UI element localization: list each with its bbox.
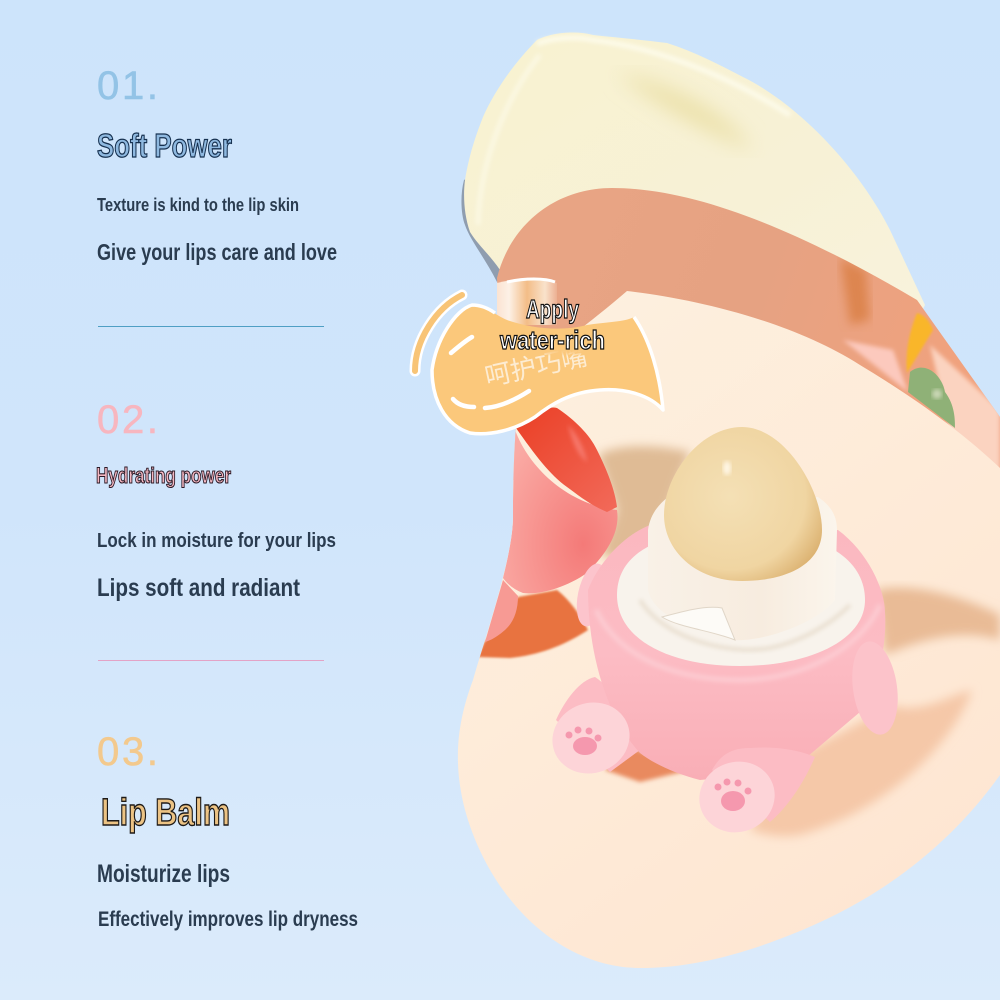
badge label: apply: Apply — [526, 294, 579, 324]
lid foot — [485, 580, 518, 642]
twist tab — [662, 607, 735, 640]
shadow behind egg — [598, 446, 690, 560]
body — [588, 525, 885, 780]
number 03: 03. — [97, 730, 158, 774]
label fade patch — [530, 340, 590, 354]
badge: apply water-rich — [415, 279, 663, 434]
cream swatch — [461, 33, 925, 320]
lip balm product — [542, 427, 903, 843]
right shadow — [875, 588, 1000, 655]
heading: lip balm: Lip Balm — [101, 792, 230, 834]
badge arc — [415, 295, 462, 371]
salmon wall — [460, 180, 1000, 480]
text: moisturize: Moisturize lips — [97, 860, 230, 888]
heading: soft power: Soft Power — [97, 127, 232, 164]
badge outline — [432, 305, 663, 434]
paw print — [566, 726, 602, 755]
left ear — [576, 564, 602, 626]
lid red interior — [516, 407, 617, 512]
heading: hydrating power: Hydrating power — [96, 463, 231, 488]
section 3: lip balm — [97, 730, 358, 931]
paw print — [714, 778, 752, 811]
background toy colours — [907, 313, 1000, 480]
divider blue — [98, 326, 324, 327]
table surface — [440, 291, 1000, 1000]
text: care and love: Give your lips care and love — [97, 239, 337, 265]
text: texture: Texture is kind to the lip skin — [97, 195, 299, 215]
text: soft and radiant: Lips soft and radiant — [97, 574, 301, 602]
glow strip — [497, 279, 557, 325]
lower shadow: under lid — [478, 590, 588, 658]
white ring — [617, 546, 865, 666]
number 02: 02. — [97, 398, 158, 442]
background pink block — [843, 340, 908, 392]
number 01: 01. — [97, 64, 158, 108]
body rim — [596, 605, 880, 680]
badge label: water-rich: water-rich — [499, 325, 605, 355]
section 2: hydrating power — [96, 398, 336, 661]
left paw — [552, 702, 630, 774]
collar — [648, 497, 837, 640]
text: dryness: Effectively improves lip dryness — [98, 908, 358, 931]
egg balm — [664, 427, 822, 581]
pink lid — [503, 430, 618, 593]
ring inner shadow — [640, 600, 850, 650]
foot shadow — [604, 751, 682, 784]
divider pink — [98, 660, 324, 661]
section 1: soft power — [97, 64, 337, 327]
text: lock in moisture: Lock in moisture for your lips — [97, 530, 336, 552]
badge highlights — [451, 337, 529, 408]
right leg — [700, 748, 815, 832]
badge body — [432, 305, 663, 434]
faded label: 呵护巧嘴 — [482, 341, 590, 392]
dark wall shadow — [840, 258, 870, 325]
lower right shadow — [750, 690, 972, 836]
product photo blob — [440, 180, 1000, 1000]
left leg back — [556, 677, 640, 772]
right ear — [852, 650, 898, 735]
